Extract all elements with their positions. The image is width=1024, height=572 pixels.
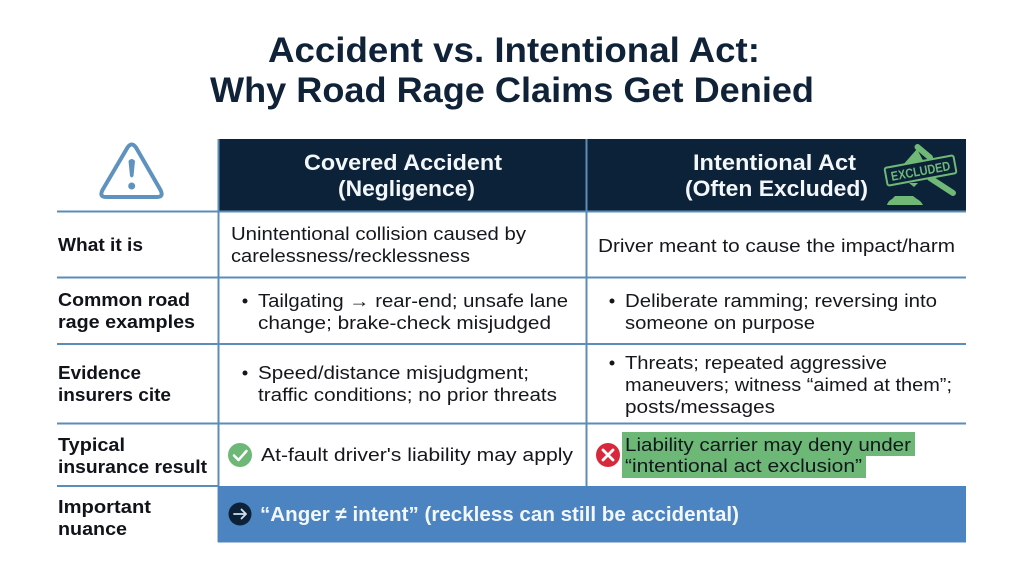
row: what it is: carelessness/recklessness: [231, 246, 470, 266]
row: evidence insurers cite: insurers cite: [58, 385, 171, 405]
column heading: intentional act: [685, 150, 868, 201]
row: typical insurance result: At-fault driver's liability may apply: [261, 445, 573, 465]
title: [210, 31, 814, 110]
row: evidence insurers cite: Speed/distance misjudgment;: [258, 363, 529, 383]
row: what it is: What it is: [58, 235, 143, 255]
icon: gavel with excluded stamp: EXCLUDED: [890, 158, 951, 184]
column heading: covered accident: Covered Accident: [304, 150, 503, 175]
icon: warning triangle: [101, 144, 162, 197]
row: common road rage examples: [58, 290, 937, 333]
row: important nuance label: [58, 497, 151, 539]
column heading: intentional act: (Often Excluded): [685, 176, 868, 201]
title: Why Road Rage Claims Get Denied: [210, 71, 814, 110]
table grid: [57, 139, 966, 542]
row: what it is: Driver meant to cause the impact/harm: [598, 236, 955, 256]
row: evidence insurers cite: Evidence: [58, 363, 141, 383]
column heading: covered accident: [304, 150, 503, 201]
row: common road rage examples: someone on purpose: [625, 313, 815, 333]
title: Accident vs. Intentional Act:: [268, 31, 760, 70]
row: evidence insurers cite: Threats; repeated aggressive: [625, 353, 887, 373]
row: evidence insurers cite: posts/messages: [625, 397, 775, 417]
highlighted denial text: Liability carrier may deny under: [625, 435, 911, 455]
row: common road rage examples: rage examples: [58, 312, 195, 332]
icon: red cross: [596, 443, 620, 467]
row: common road rage examples: change; brake-check misjudged: [258, 313, 551, 333]
nuance banner: “Anger ≠ intent” (reckless can still be accidental): [260, 504, 739, 526]
highlighted denial text: [622, 432, 915, 478]
row: what it is: Unintentional collision caused by: [231, 224, 526, 244]
row: evidence insurers cite: maneuvers; witness “aimed at them”;: [625, 375, 952, 395]
highlighted denial text: “intentional act exclusion”: [625, 456, 862, 476]
nuance banner: [218, 486, 966, 542]
row: typical insurance result: Typical: [58, 435, 125, 455]
row: common road rage examples: Common road: [58, 290, 190, 310]
row: what it is: [58, 224, 955, 266]
row: important nuance label: nuance: [58, 519, 127, 539]
row: common road rage examples: Tailgating → rear-end; unsafe lane: [258, 291, 568, 311]
column heading: covered accident: (Negligence): [338, 176, 475, 201]
row: important nuance label: Important: [58, 497, 151, 517]
row: evidence insurers cite: [58, 353, 952, 417]
header row background: [219, 139, 966, 211]
icon: green check: [228, 443, 252, 467]
row: typical insurance result: [58, 432, 915, 478]
row: typical insurance result: insurance result: [58, 457, 207, 477]
row: common road rage examples: Deliberate ramming; reversing into: [625, 291, 937, 311]
row: evidence insurers cite: traffic conditions; no prior threats: [258, 385, 557, 405]
icon: gavel with excluded stamp: [884, 147, 957, 205]
column heading: intentional act: Intentional Act: [693, 150, 857, 175]
icon: arrow circle: [228, 502, 252, 526]
